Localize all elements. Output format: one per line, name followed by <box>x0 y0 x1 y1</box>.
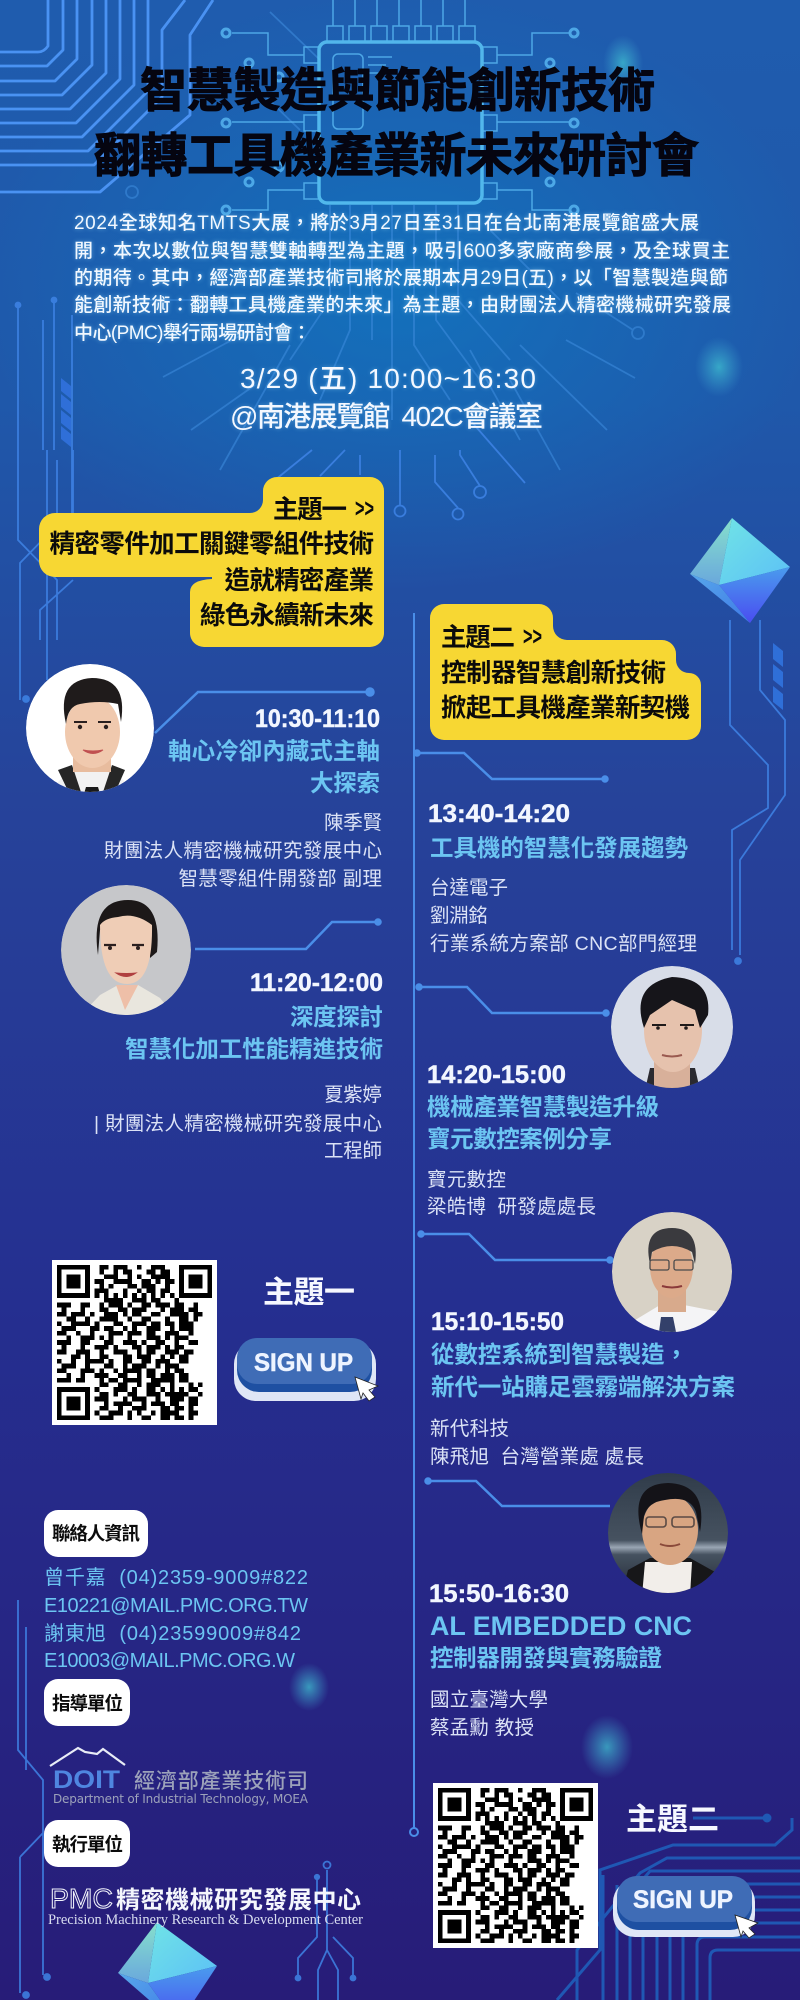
session 4 text: 機械產業智慧製造升級 <box>427 1093 659 1120</box>
session 2 text: | 財團法人精密機械研究發展中心 <box>94 1113 382 1135</box>
panel: contact info: E10003@MAIL.PMC.ORG.W <box>44 1650 295 1672</box>
panel: theme two heading bubble <box>430 604 701 740</box>
session 2 text <box>94 969 383 1162</box>
session 3 text <box>428 800 697 955</box>
panel: contact info: 謝東旭 (04)23599009#842 <box>44 1622 301 1645</box>
QR code theme one <box>52 1260 217 1425</box>
glow blobs <box>289 35 743 1779</box>
session 2 text: 深度探討 <box>290 1004 383 1030</box>
session 1 text: 10:30-11:10 <box>255 705 380 733</box>
logo: PMC: PMC <box>50 1883 113 1914</box>
panel: guiding unit <box>44 1679 130 1726</box>
logo: DOIT: DOIT <box>53 1766 120 1794</box>
button: sign up theme two <box>613 1876 758 1938</box>
title <box>94 64 699 182</box>
panel: contact info: E10221@MAIL.PMC.ORG.TW <box>44 1595 308 1617</box>
session 2 text: 工程師 <box>324 1140 382 1162</box>
session 2 text: 夏紫婷 <box>324 1084 382 1106</box>
title: 翻轉工具機產業新未來研討會 <box>94 129 699 182</box>
session 4 text: 14:20-15:00 <box>427 1061 566 1089</box>
session 1 text: 智慧零組件開發部 副理 <box>178 868 382 890</box>
logo: DOIT: 經濟部產業技術司 <box>134 1770 308 1793</box>
intro paragraph: 中心(PMC)舉行兩場研討會： <box>74 322 311 344</box>
panel: theme one heading bubble: 綠色永續新未來 <box>200 602 374 630</box>
panel: theme one heading bubble <box>39 477 384 647</box>
heading: theme one signup: 主題一 <box>263 1275 355 1310</box>
panel: theme one heading bubble: 主題一 <box>273 496 347 524</box>
session 5 text: 陳飛旭 台灣營業處 處長 <box>430 1446 644 1468</box>
panel: executing unit <box>44 1820 130 1867</box>
panel: theme two heading bubble: 控制器智慧創新技術 <box>441 660 666 688</box>
photo: speaker five <box>608 1473 728 1600</box>
session 4 text <box>427 1061 659 1218</box>
panel: guiding unit: 指導單位 <box>52 1693 123 1714</box>
timeline line <box>410 613 418 1836</box>
session 3 text: 台達電子 <box>430 877 508 899</box>
connector lines <box>155 688 612 1506</box>
photo: speaker four <box>612 1212 732 1340</box>
session 6 text: 15:50-16:30 <box>429 1580 569 1608</box>
session 4 text: 寶元數控 <box>427 1169 506 1191</box>
photo: speaker three <box>611 966 733 1090</box>
panel: executing unit: 執行單位 <box>52 1834 123 1855</box>
session 3 text: 行業系統方案部 CNC部門經理 <box>430 933 697 955</box>
logo: DOIT: Department of Industrial Technology, MOEA <box>53 1792 309 1806</box>
session 4 text: 梁皓博 研發處處長 <box>427 1196 596 1218</box>
photo: speaker one <box>26 664 154 800</box>
session 5 text: 15:10-15:50 <box>431 1308 564 1336</box>
icon: diamond bottom <box>118 1922 217 2000</box>
session 3 text: 工具機的智慧化發展趨勢 <box>430 835 688 861</box>
intro paragraph: 開，本次以數位與智慧雙軸轉型為主題，吸引600多家廠商參展，及全球買主 <box>74 239 730 262</box>
session 3 text: 13:40-14:20 <box>428 800 570 828</box>
panel: theme two heading bubble: >> <box>523 623 542 651</box>
session 6 text: AL EMBEDDED CNC <box>430 1611 692 1641</box>
logo: PMC: 精密機械研究發展中心 <box>116 1886 361 1914</box>
date and venue: @南港展覽館 402C會議室 <box>230 401 543 432</box>
session 6 text: 國立臺灣大學 <box>430 1689 548 1711</box>
session 1 text: 陳季賢 <box>324 812 382 834</box>
session 4 text: 寶元數控案例分享 <box>427 1126 612 1152</box>
panel: contact info: 曾千嘉 (04)2359-9009#822 <box>44 1566 308 1589</box>
session 6 text <box>429 1580 692 1739</box>
session 1 text <box>104 705 382 890</box>
title: 智慧製造與節能創新技術 <box>140 64 655 117</box>
panel: contact info <box>44 1510 308 1672</box>
panel: theme two heading bubble: 掀起工具機產業新契機 <box>441 694 690 722</box>
intro paragraph <box>74 212 731 344</box>
icon: diamond top right <box>690 518 790 623</box>
panel: theme one heading bubble: >> <box>355 495 374 523</box>
session 5 text: 新代科技 <box>430 1418 509 1440</box>
session 3 text: 劉淵銘 <box>430 905 488 927</box>
session 1 text: 大探索 <box>310 770 380 796</box>
session 1 text: 財團法人精密機械研究發展中心 <box>104 840 382 862</box>
intro paragraph: 2024全球知名TMTS大展，將於3月27日至31日在台北南港展覽館盛大展 <box>74 212 699 234</box>
session 2 text: 11:20-12:00 <box>250 969 383 997</box>
photo: speaker two <box>61 885 191 1016</box>
panel: contact info: 聯絡人資訊 <box>52 1523 140 1544</box>
button: sign up theme one <box>234 1338 378 1401</box>
button: sign up theme one: SIGN UP <box>254 1349 353 1377</box>
session 1 text: 軸心冷卻內藏式主軸 <box>168 738 380 764</box>
panel: theme one heading bubble: 精密零件加工關鍵零組件技術 <box>50 530 374 558</box>
logo: PMC <box>48 1883 363 1928</box>
session 5 text: 從數控系統到智慧製造， <box>431 1342 688 1368</box>
date and venue <box>230 363 543 432</box>
heading: theme two signup: 主題二 <box>626 1802 719 1837</box>
panel: theme two heading bubble: 主題二 <box>441 624 515 652</box>
session 6 text: 蔡孟勳 教授 <box>430 1717 534 1739</box>
session 5 text: 新代一站購足雲霧端解決方案 <box>431 1373 735 1400</box>
intro paragraph: 的期待。其中，經濟部產業技術司將於展期本月29日(五)，以「智慧製造與節 <box>74 267 728 289</box>
date and venue: 3/29 (五) 10:00~16:30 <box>240 363 536 394</box>
QR code theme two <box>433 1783 598 1948</box>
logo: DOIT <box>50 1748 309 1806</box>
button: sign up theme two: SIGN UP <box>633 1886 733 1914</box>
session 2 text: 智慧化加工性能精進技術 <box>125 1036 383 1062</box>
intro paragraph: 能創新技術：翻轉工具機產業的未來」為主題，由財團法人精密機械研究發展 <box>74 294 731 316</box>
logo: PMC: Precision Machinery Research & Development Center <box>48 1912 363 1928</box>
session 6 text: 控制器開發與實務驗證 <box>430 1644 662 1671</box>
panel: theme one heading bubble: 造就精密產業 <box>224 566 374 595</box>
session 5 text <box>430 1308 735 1468</box>
central chip circuit <box>222 0 578 214</box>
